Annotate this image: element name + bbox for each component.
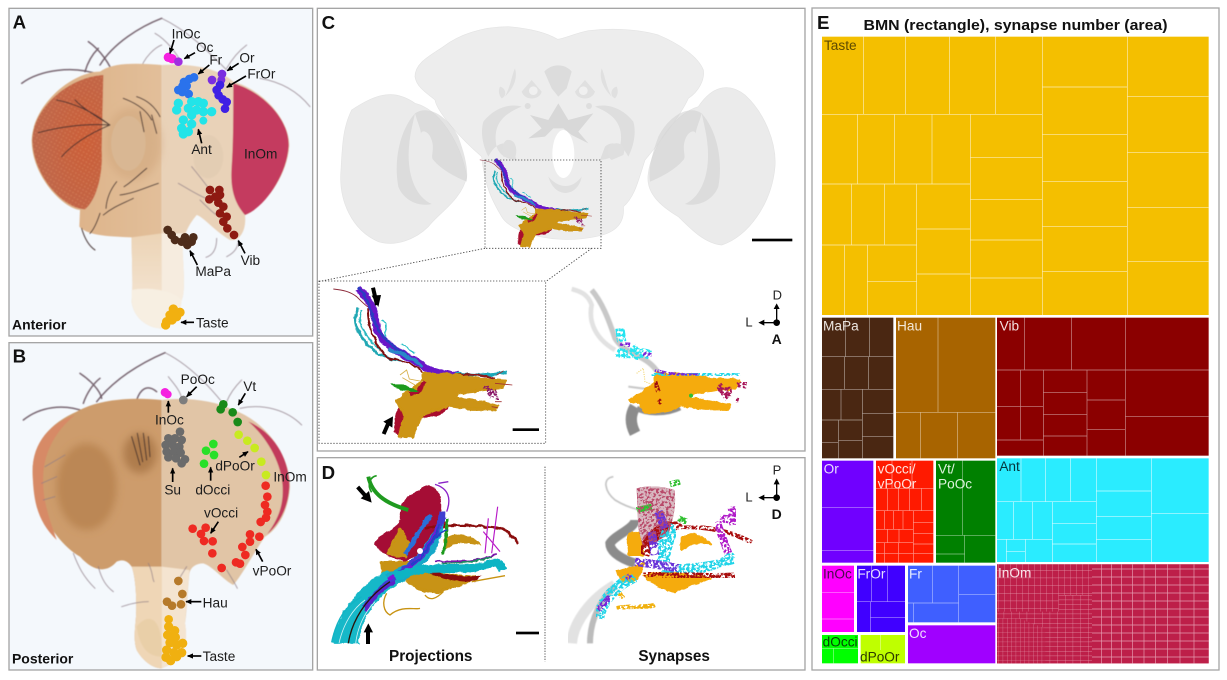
compass: anterior view: A — [772, 331, 782, 347]
cell group: InOm — [997, 564, 1209, 663]
head labels and arrows: B: Su — [164, 482, 181, 497]
dots: Vib — [205, 186, 238, 239]
synapses view — [572, 289, 747, 433]
head labels and arrows: A: Taste — [196, 316, 229, 331]
panel: E treemap — [812, 8, 1219, 670]
dots: Taste — [161, 304, 185, 330]
head labels and arrows: A: Oc — [196, 40, 214, 55]
head labels and arrows: B — [155, 372, 307, 664]
head labels and arrows: A: InOc — [172, 26, 201, 41]
compass: dorsal view: D — [772, 506, 782, 522]
cell group: MaPa — [822, 318, 893, 458]
dots: InOc — [164, 53, 177, 63]
dots: Taste — [161, 615, 187, 665]
scale bar — [752, 239, 792, 241]
head photo: anterior fly head — [22, 18, 310, 328]
cell group: FrOr — [857, 566, 905, 632]
cell group: Or — [822, 461, 873, 563]
cell group: Ant: Ant — [999, 459, 1020, 474]
cell group: Vib: Vib — [1000, 318, 1020, 333]
panel letter A: A — [13, 12, 26, 33]
arrow: upper tract — [372, 288, 381, 307]
cell group: vOcci/vPoOr — [876, 461, 933, 563]
panel: A anterior head — [9, 8, 313, 336]
cell group: Vt/PoOc: Vt/ — [938, 461, 955, 476]
cell group: MaPa: MaPa — [823, 318, 859, 333]
dots: InOc — [161, 388, 172, 398]
head labels and arrows: A: Ant — [191, 142, 212, 157]
head labels and arrows: B: vOcci — [204, 506, 238, 521]
head labels and arrows: B: dOcci — [195, 482, 230, 497]
cell group: InOc — [822, 566, 854, 632]
cell group: dOcci: dOcci — [823, 634, 858, 649]
cell group: InOm: InOm — [998, 565, 1031, 580]
head labels and arrows: A — [170, 26, 277, 331]
head labels and arrows: A: Vib — [241, 253, 261, 268]
compass: anterior view: D — [773, 287, 782, 302]
head photo: posterior fly head — [23, 353, 302, 668]
projections view — [332, 476, 519, 643]
cell group: Hau: Hau — [897, 318, 922, 333]
compass: anterior view: L — [745, 315, 753, 330]
head labels and arrows: A: FrOr — [247, 66, 276, 81]
head labels and arrows: A: MaPa — [195, 264, 231, 279]
cell group: Fr — [908, 566, 995, 622]
cell group: vOcci/vPoOr: vPoOr — [878, 476, 917, 491]
treemap: lower groups — [822, 458, 1209, 665]
dots: Vt — [216, 400, 242, 426]
dots: Or — [208, 70, 226, 84]
dots: Hau — [163, 577, 187, 610]
cell: Oc: Oc — [909, 626, 927, 641]
cell group: Vt/PoOc — [936, 461, 995, 563]
dots: PoOc — [179, 396, 188, 404]
cell group: Vt/PoOc: PoOc — [938, 476, 972, 491]
head labels and arrows: B: Hau — [203, 595, 228, 610]
panel letter D: D — [322, 462, 335, 483]
head labels and arrows: B: vPoOr — [253, 563, 292, 578]
brain outline — [341, 27, 775, 245]
dots: Ant — [172, 97, 216, 139]
panel: C whole-brain and anterior view — [317, 8, 805, 451]
dots: dOcci — [200, 440, 218, 468]
cell group: Fr: Fr — [909, 566, 922, 581]
dots: dPoOr — [234, 430, 270, 479]
cell group: vOcci/vPoOr: vOcci/ — [878, 461, 916, 476]
head labels and arrows: B: InOm — [273, 469, 307, 484]
scale bar — [513, 428, 539, 431]
view label: Posterior: Posterior — [12, 650, 74, 666]
compass: dorsal view: L — [745, 490, 753, 505]
divider — [544, 467, 546, 662]
inset: anterior projections and synapses — [319, 281, 782, 443]
arrow: lower tract — [383, 416, 393, 434]
compass: anterior view — [745, 287, 782, 347]
cell group: Or: Or — [824, 461, 839, 476]
caption: Projections: Projections — [389, 648, 472, 665]
arrow: dorsal tract upper — [358, 487, 372, 503]
panel letter B: B — [13, 346, 26, 367]
treemap: MaPa, Hau, Vib — [822, 318, 1209, 458]
cell group: Hau — [896, 318, 995, 458]
dots: vPoOr and vOcci — [188, 481, 272, 572]
view label: Anterior: Anterior — [12, 316, 67, 332]
compass: dorsal view: P — [773, 462, 781, 477]
scale bar — [516, 632, 539, 634]
cell group: Ant — [997, 458, 1209, 562]
arrow: dorsal tract lower — [364, 623, 373, 644]
cell group: dPoOr: dPoOr — [860, 650, 900, 665]
cell group: Vib — [997, 318, 1209, 456]
panel letter E: E — [817, 12, 829, 33]
projections view — [333, 288, 512, 438]
panel: D dorsal view — [317, 458, 805, 670]
cell group: dOcci — [822, 634, 858, 663]
dots: Fr — [174, 73, 198, 98]
dots: MaPa — [163, 226, 198, 249]
head labels and arrows: B: Vt — [243, 379, 256, 394]
head labels and arrows: A: Or — [239, 50, 255, 65]
panel: B posterior head — [9, 343, 313, 670]
cell group: InOc: InOc — [823, 566, 852, 581]
compass: dorsal view — [745, 462, 782, 522]
dots: Oc — [174, 57, 183, 66]
neuron projections in brain — [480, 159, 592, 247]
cell group: dPoOr — [860, 635, 905, 665]
head labels and arrows: B: Taste — [203, 649, 235, 664]
caption: Synapses: Synapses — [638, 648, 710, 665]
synapses view — [572, 477, 752, 643]
cell group: FrOr: FrOr — [857, 566, 886, 581]
head labels and arrows: A: Fr — [209, 52, 223, 67]
head labels and arrows: B: dPoOr — [215, 459, 255, 474]
head labels and arrows: B: InOc — [155, 412, 184, 427]
dots: Su — [161, 427, 189, 468]
dots: FrOr — [212, 81, 231, 113]
zoom box and connecting lines — [318, 160, 601, 282]
treemap: Taste: Taste — [824, 38, 857, 53]
cell: Oc — [908, 625, 995, 663]
panel letter C: C — [322, 12, 335, 33]
head labels and arrows: A: InOm — [244, 147, 277, 162]
head labels and arrows: B: PoOc — [181, 372, 215, 387]
treemap title: BMN (rectangle), synapse number (area) — [864, 18, 1168, 34]
treemap: Taste — [822, 37, 1209, 315]
